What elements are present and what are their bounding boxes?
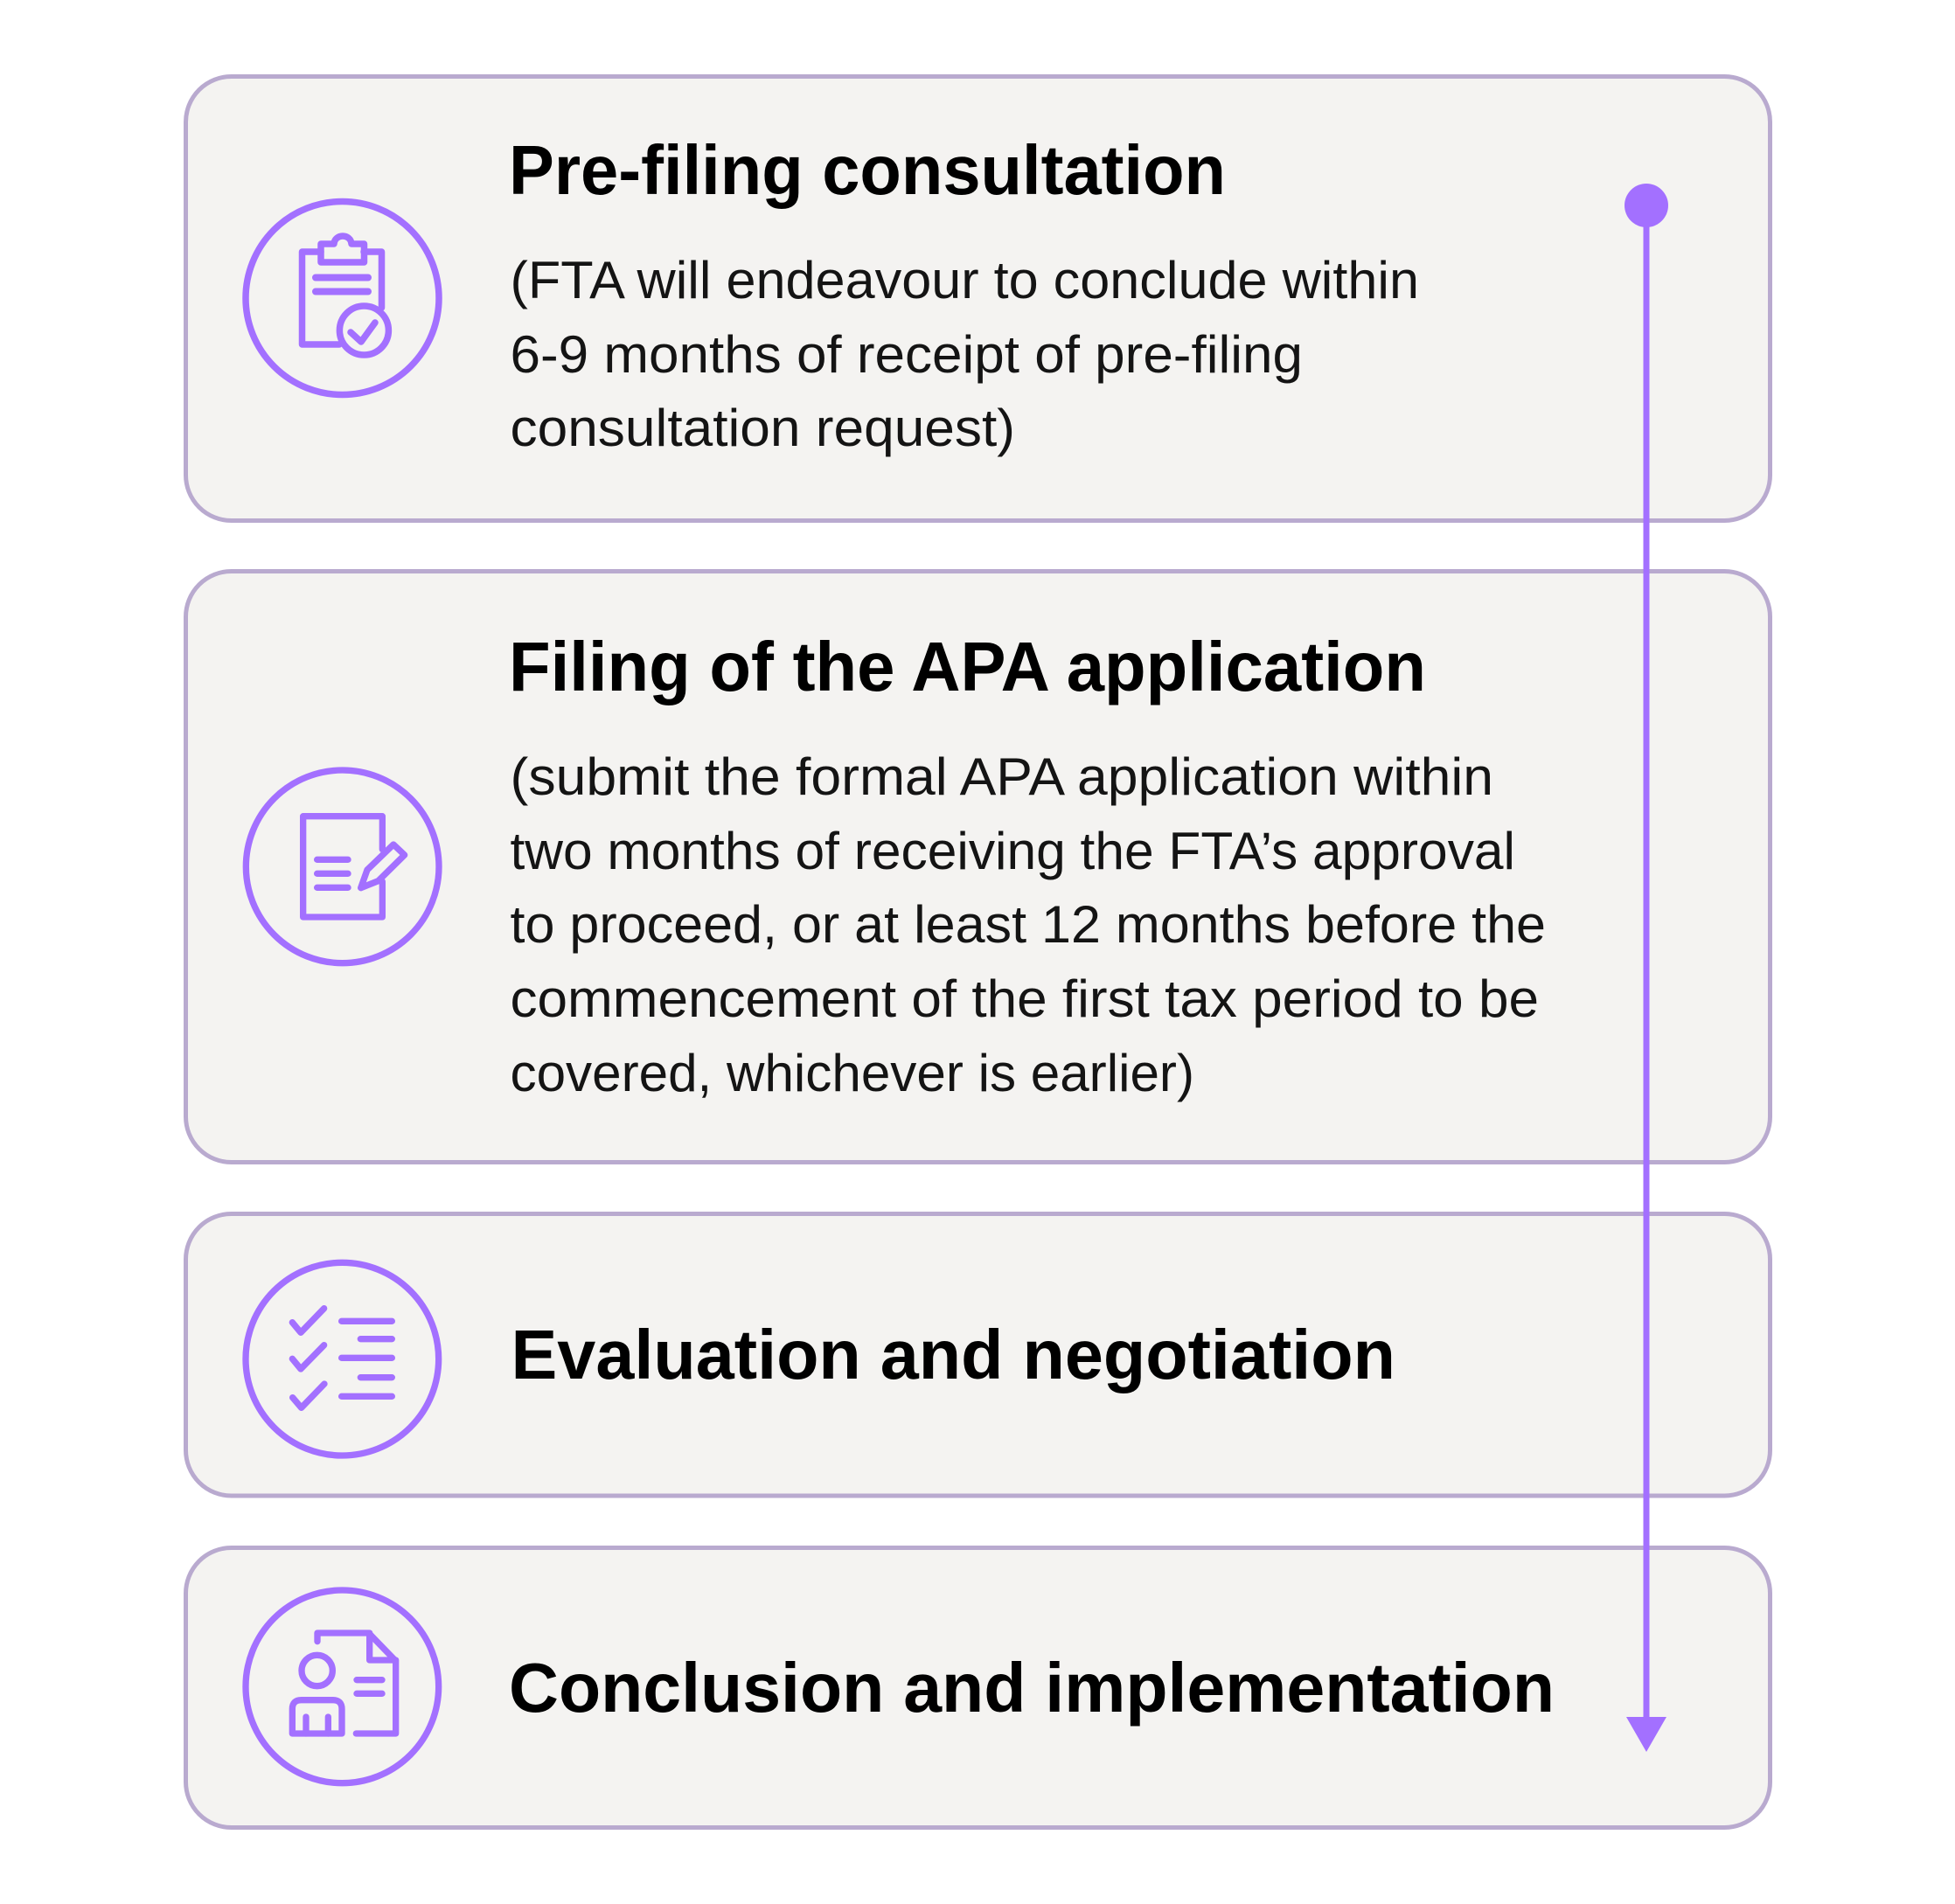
text block: filing description: (submit the formal APA application within <box>511 747 1493 806</box>
card background <box>185 77 1770 521</box>
arrow: timeline from first step to last <box>1625 184 1668 1752</box>
text block: filing description <box>511 747 1546 1102</box>
card background <box>185 572 1770 1163</box>
text block: filing description: to proceed, or at least 12 months before the <box>511 895 1546 954</box>
heading: conclusion and implementation: Conclusion and implementation <box>509 1649 1555 1727</box>
text block: filing description: two months of receiving the FTA’s approval <box>511 822 1515 880</box>
text block: filing description: commencement of the first tax period to be <box>511 969 1539 1028</box>
text block: pre-filing description: (FTA will endeavour to conclude within <box>511 251 1419 309</box>
panel: conclusion and implementation <box>185 1547 1770 1827</box>
icon: checklist <box>246 1262 439 1456</box>
heading: pre-filing consultation: Pre-filing consultation <box>509 131 1226 209</box>
icon: clipboard with check <box>246 201 439 395</box>
panel: pre-filing consultation <box>185 77 1770 521</box>
card background <box>185 1547 1770 1827</box>
panel: filing of the APA application <box>185 572 1770 1163</box>
icon: document with pencil <box>246 770 439 963</box>
text block: filing description: covered, whichever is earlier) <box>511 1044 1194 1102</box>
text block: pre-filing description <box>511 251 1419 457</box>
panel: evaluation and negotiation <box>185 1213 1770 1496</box>
card background <box>185 1213 1770 1496</box>
heading: evaluation and negotiation: Evaluation and negotiation <box>511 1316 1395 1393</box>
text block: pre-filing description: 6-9 months of receipt of pre-filing <box>511 325 1303 384</box>
heading: filing of the APA application: Filing of the APA application <box>509 628 1426 705</box>
text block: pre-filing description: consultation request) <box>511 399 1015 457</box>
icon: person with document <box>246 1590 439 1783</box>
